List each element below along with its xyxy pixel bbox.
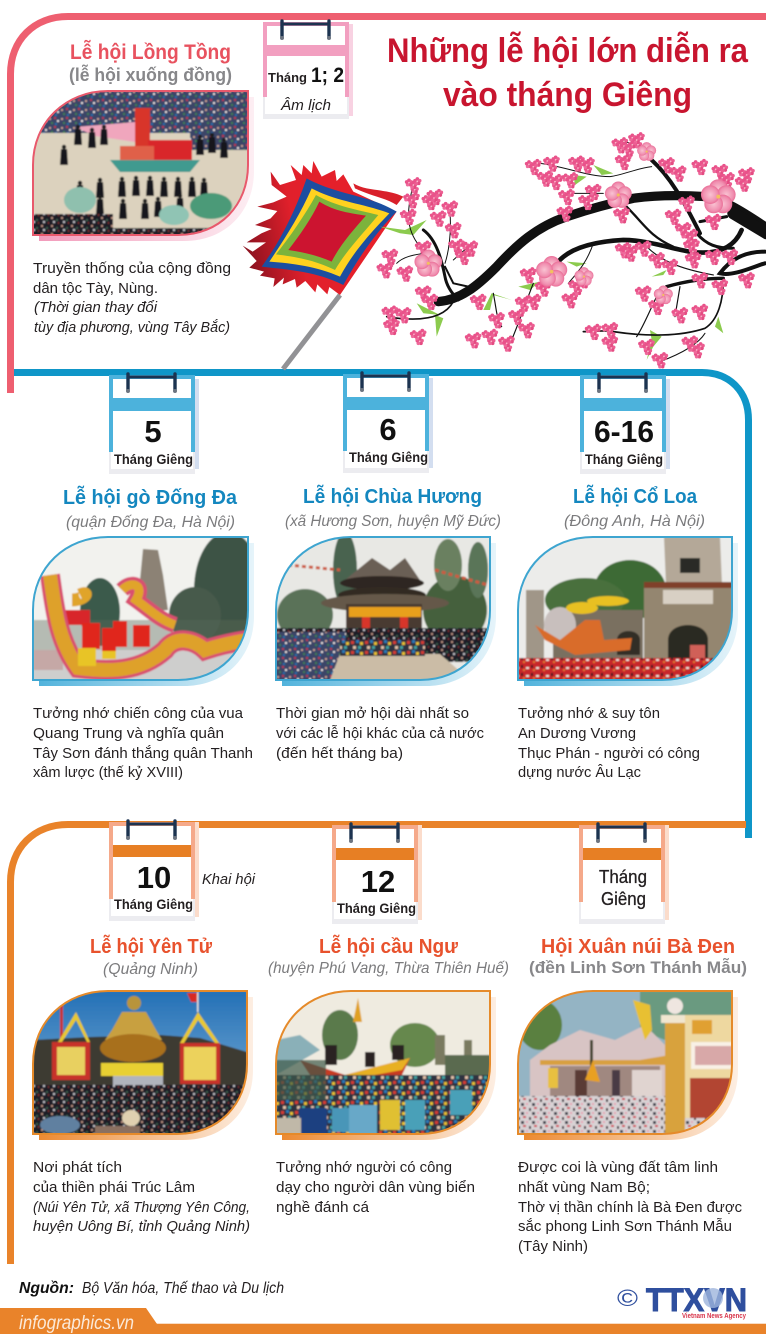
heading: Lễ hội Yên Tử: Lễ hội Yên Tử xyxy=(90,934,212,958)
text: Lễ hội gò Đống Đa description: Tây Sơn đánh thắng quân Thanh xyxy=(33,745,253,762)
heading: Lễ hội Chùa Hương xyxy=(285,484,501,530)
source line: Nguồn: xyxy=(19,1280,74,1297)
title xyxy=(387,32,749,114)
pink section frame xyxy=(10,16,766,393)
calendar: Tháng Giêng xyxy=(579,824,669,924)
text: Lễ hội Chùa Hương description: Thời gian mở hội dài nhất so xyxy=(276,705,469,722)
logo: TTXVN: Vietnam News Agency xyxy=(682,1311,747,1320)
calendar: 12 Tháng Giêng: Tháng Giêng xyxy=(337,901,416,916)
text: Lễ hội Yên Tử description: Nơi phát tích xyxy=(33,1159,122,1176)
photo: Lễ hội gò Đống Đa xyxy=(33,532,262,686)
source line xyxy=(19,1280,284,1297)
text: Lễ hội Chùa Hương description: (đến hết tháng ba) xyxy=(276,745,403,762)
heading: Lễ hội cầu Ngư xyxy=(268,934,509,977)
text: Hội Xuân núi Bà Đen description: nhất vùng Nam Bộ; xyxy=(518,1179,650,1196)
calendar: 6-16 Tháng Giêng: 6-16 xyxy=(594,414,654,449)
text: Lễ hội Lồng Tồng description: Truyền thống của cộng đồng xyxy=(33,260,231,277)
heading: Lễ hội Lồng Tồng xyxy=(69,40,232,85)
icon: festival flag xyxy=(243,161,403,369)
text: Hội Xuân núi Bà Đen description: sắc phong Linh Sơn Thánh Mẫu xyxy=(518,1218,732,1235)
text: Lễ hội Cổ Loa description: An Dương Vương xyxy=(518,725,636,742)
calendar: 6-16 Tháng Giêng xyxy=(580,374,670,474)
text: Hội Xuân núi Bà Đen description: Thờ vị thần chính là Bà Đen được xyxy=(518,1199,742,1216)
calendar: 6 Tháng Giêng xyxy=(343,373,433,473)
text: Lễ hội Cổ Loa description: Tưởng nhớ & suy tôn xyxy=(518,705,660,722)
text: Hội Xuân núi Bà Đen description xyxy=(518,1159,742,1255)
photo: Lễ hội Cổ Loa xyxy=(518,537,738,686)
calendar: Tháng Giêng: Tháng xyxy=(599,867,647,887)
text: Lễ hội Lồng Tồng description: tùy địa phương, vùng Tây Bắc) xyxy=(34,319,230,336)
text: Lễ hội Cổ Loa description: dựng nước Âu Lạc xyxy=(518,764,641,781)
text: Lễ hội cầu Ngư description xyxy=(276,1159,475,1216)
text: Lễ hội Yên Tử description: (Núi Yên Tử, xã Thượng Yên Công, xyxy=(33,1199,250,1216)
heading: Lễ hội Yên Tử: (Quảng Ninh) xyxy=(103,961,198,978)
photo: Lễ hội cầu Ngư xyxy=(276,991,496,1140)
heading: Lễ hội cầu Ngư: (huyện Phú Vang, Thừa Thiên Huế) xyxy=(268,960,509,977)
logo: TTXVN: © xyxy=(617,1285,638,1311)
text: Lễ hội Lồng Tồng description xyxy=(33,260,231,336)
calendar: 12 Tháng Giêng: 12 xyxy=(361,864,395,899)
calendar: Tháng Giêng: Giêng xyxy=(601,889,646,909)
heading: Lễ hội Cổ Loa: Lễ hội Cổ Loa xyxy=(573,484,698,508)
heading: Lễ hội Lồng Tồng: Lễ hội Lồng Tồng xyxy=(70,40,231,64)
text: Lễ hội gò Đống Đa description: Quang Trung và nghĩa quân xyxy=(33,725,224,742)
heading: Hội Xuân núi Bà Đen: Hội Xuân núi Bà Đen xyxy=(541,936,735,958)
photo: Lễ hội Lồng Tồng xyxy=(33,91,254,241)
calendar: 6 Tháng Giêng: 6 xyxy=(379,412,397,447)
text: Hội Xuân núi Bà Đen description: Được coi là vùng đất tâm linh xyxy=(518,1159,718,1176)
heading: Lễ hội Chùa Hương: Lễ hội Chùa Hương xyxy=(303,484,482,508)
text: Hội Xuân núi Bà Đen description: (Tây Ninh) xyxy=(518,1238,588,1255)
text: Lễ hội Yên Tử description: của thiền phái Trúc Lâm xyxy=(33,1179,195,1196)
calendar: Tháng 1; 2 Âm lịch: 1; 2 xyxy=(311,64,344,87)
text: Lễ hội Yên Tử description xyxy=(33,1159,250,1235)
calendar: Tháng 1; 2 Âm lịch: Tháng xyxy=(268,70,307,85)
calendar: 10 Tháng Giêng: 10 xyxy=(137,860,171,895)
calendar: 10 Tháng Giêng: Tháng Giêng xyxy=(114,897,193,912)
illustration: peach blossom branch xyxy=(377,132,766,368)
calendar: 6-16 Tháng Giêng: Tháng Giêng xyxy=(585,452,663,467)
text: Lễ hội Lồng Tồng description: (Thời gian thay đổi xyxy=(34,299,158,316)
calendar: Tháng 1; 2 Âm lịch xyxy=(263,21,353,119)
text: Lễ hội cầu Ngư description: Tưởng nhớ người có công xyxy=(276,1159,452,1176)
logo: TTXVN: TTXVN xyxy=(646,1282,747,1318)
heading: Lễ hội Yên Tử xyxy=(90,934,212,978)
text: Lễ hội Chùa Hương description xyxy=(276,705,484,762)
footer bar: infographics.vn xyxy=(19,1313,134,1334)
text: Lễ hội cầu Ngư description: nghề đánh cá xyxy=(276,1199,370,1216)
heading: Lễ hội Cổ Loa: (Đông Anh, Hà Nội) xyxy=(564,513,705,530)
calendar: 5 Tháng Giêng: 5 xyxy=(144,414,162,449)
blue section frame xyxy=(14,372,748,838)
text: Lễ hội Yên Tử description: huyện Uông Bí, tỉnh Quảng Ninh) xyxy=(33,1218,250,1235)
source line: Bộ Văn hóa, Thế thao và Du lịch xyxy=(82,1280,284,1297)
heading: Lễ hội Chùa Hương: (xã Hương Sơn, huyện Mỹ Đức) xyxy=(285,513,501,530)
text: Lễ hội gò Đống Đa description xyxy=(33,705,253,781)
photo: Lễ hội Chùa Hương xyxy=(276,532,496,686)
photo: Lễ hội Yên Tử xyxy=(33,991,253,1140)
heading: Lễ hội gò Đống Đa: Lễ hội gò Đống Đa xyxy=(63,485,238,509)
footer bar xyxy=(0,1308,766,1334)
heading: Hội Xuân núi Bà Đen: (đền Linh Sơn Thánh Mẫu) xyxy=(529,958,747,977)
heading: Lễ hội Cổ Loa xyxy=(564,484,705,530)
photo: Hội Xuân núi Bà Đen xyxy=(518,991,738,1140)
calendar: 10 Tháng Giêng xyxy=(109,821,199,921)
heading: Hội Xuân núi Bà Đen xyxy=(529,936,747,977)
note: Khai hội: Khai hội xyxy=(202,871,256,888)
calendar: 5 Tháng Giêng xyxy=(109,374,199,474)
text: Lễ hội gò Đống Đa description: xâm lược (thế kỷ XVIII) xyxy=(33,764,183,781)
title: vào tháng Giêng xyxy=(443,76,692,114)
calendar: 6 Tháng Giêng: Tháng Giêng xyxy=(349,450,428,465)
calendar: Tháng 1; 2 Âm lịch: Âm lịch xyxy=(280,97,331,114)
text: Lễ hội Lồng Tồng description: dân tộc Tày, Nùng. xyxy=(33,280,158,297)
calendar: 5 Tháng Giêng: Tháng Giêng xyxy=(114,452,193,467)
heading: Lễ hội cầu Ngư: Lễ hội cầu Ngư xyxy=(319,934,458,958)
text: Lễ hội Cổ Loa description: Thục Phán - người có công xyxy=(518,745,700,762)
calendar: 12 Tháng Giêng xyxy=(332,824,422,924)
text: Lễ hội cầu Ngư description: dạy cho người dân vùng biển xyxy=(276,1179,475,1196)
text: Lễ hội Cổ Loa description xyxy=(518,705,700,781)
text: Lễ hội gò Đống Đa description: Tưởng nhớ chiến công của vua xyxy=(33,705,244,722)
heading: Lễ hội gò Đống Đa: (quận Đống Đa, Hà Nội) xyxy=(66,514,235,531)
text: Lễ hội Chùa Hương description: với các lễ hội khác của cả nước xyxy=(276,725,484,742)
heading: Lễ hội gò Đống Đa xyxy=(63,485,238,531)
orange section frame xyxy=(10,824,746,1264)
heading: Lễ hội Lồng Tồng: (lễ hội xuống đồng) xyxy=(69,64,232,85)
